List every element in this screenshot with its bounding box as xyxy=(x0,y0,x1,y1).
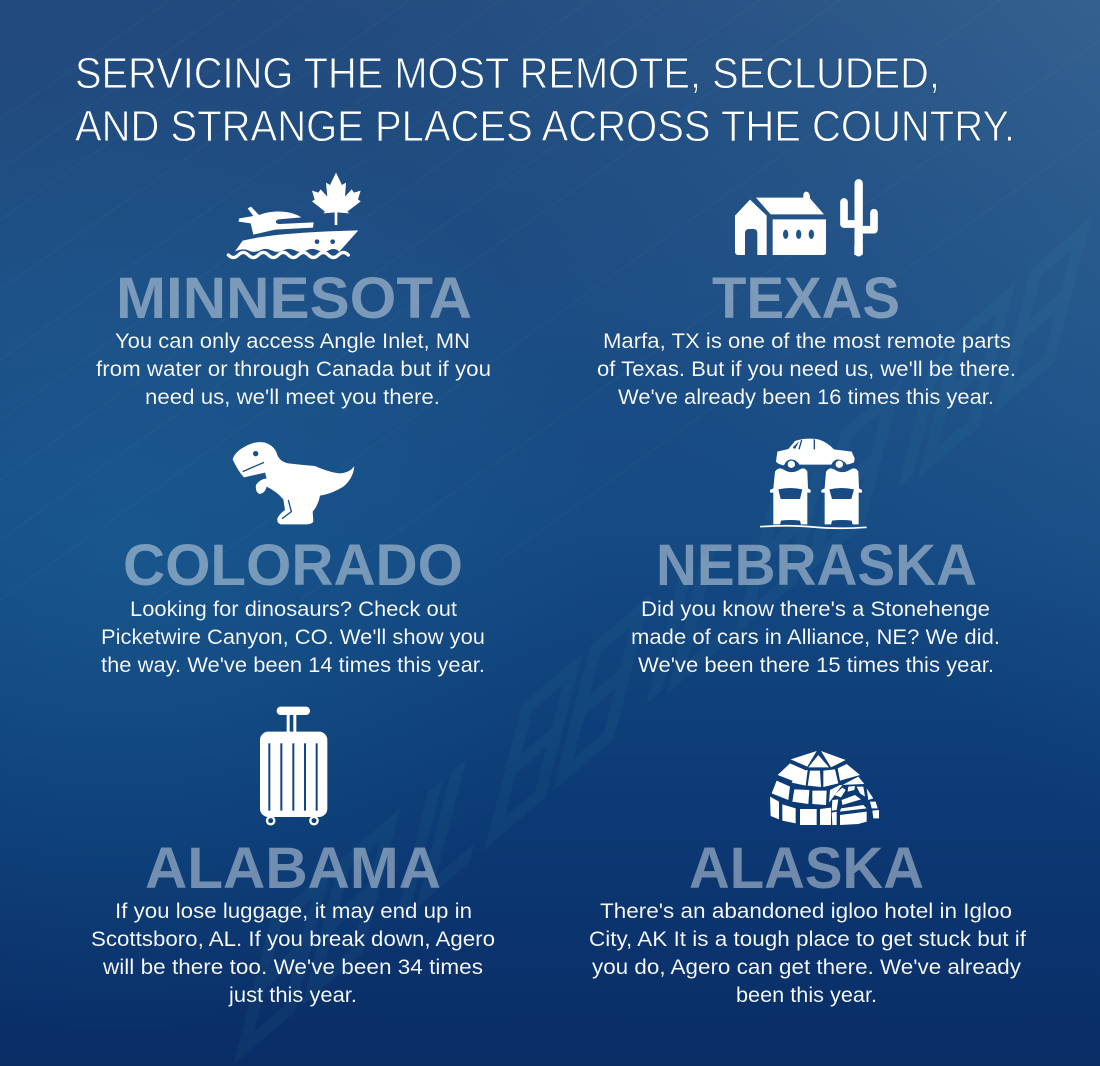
text: Colorado description xyxy=(101,597,485,677)
text: Alabama description: just this year. xyxy=(228,983,357,1007)
title: AND STRANGE PLACES ACROSS THE COUNTRY. xyxy=(75,102,1015,151)
text: Alabama description: If you lose luggage, it may end up in xyxy=(115,899,472,923)
text: Alaska description: been this year. xyxy=(736,983,877,1007)
text: Nebraska description xyxy=(631,597,1000,677)
icon: igloo xyxy=(770,751,879,825)
text: Alaska description: you do, Agero can get there. We've already xyxy=(592,955,1021,979)
text: Colorado description: Picketwire Canyon, CO. We'll show you xyxy=(101,625,485,649)
icon: dinosaur xyxy=(233,442,354,524)
panel: Alabama xyxy=(91,707,495,1007)
title xyxy=(75,49,1015,151)
text: Colorado description: Looking for dinosaurs? Check out xyxy=(130,597,457,621)
heading: Minnesota: MINNESOTA xyxy=(116,266,472,331)
panel: Minnesota xyxy=(96,173,491,409)
heading: Colorado: COLORADO xyxy=(123,533,463,598)
text: Colorado description: the way. We've been 14 times this year. xyxy=(101,653,485,677)
text: Minnesota description: need us, we'll meet you there. xyxy=(145,385,440,409)
text: Alaska description xyxy=(589,899,1026,1007)
text: Alabama description: will be there too. We've been 34 times xyxy=(102,955,483,979)
heading: Texas: TEXAS xyxy=(712,266,900,331)
heading: Nebraska: NEBRASKA xyxy=(656,533,977,598)
text: Nebraska description: We've been there 15 times this year. xyxy=(638,653,994,677)
text: Alaska description: There's an abandoned igloo hotel in Igloo xyxy=(600,899,1012,923)
text: Alabama description: Scottsboro, AL. If you break down, Agero xyxy=(91,927,495,951)
text: Minnesota description xyxy=(96,329,491,409)
text: Texas description: Marfa, TX is one of the most remote parts xyxy=(603,329,1011,353)
icon: house and cactus xyxy=(735,183,874,255)
icon: car stonehenge xyxy=(760,439,867,528)
panel: Colorado xyxy=(101,442,485,677)
text: Texas description xyxy=(597,329,1016,409)
text: Texas description: We've already been 16 times this year. xyxy=(618,385,994,409)
icon: yacht and maple leaf xyxy=(228,173,361,257)
text: Nebraska description: made of cars in Alliance, NE? We did. xyxy=(631,625,1000,649)
icon: suitcase xyxy=(260,707,327,824)
heading: Alabama: ALABAMA xyxy=(145,836,441,901)
heading: Alaska: ALASKA xyxy=(689,836,924,901)
panel: Nebraska xyxy=(631,439,1000,677)
title: SERVICING THE MOST REMOTE, SECLUDED, xyxy=(75,49,940,98)
panel: Texas xyxy=(597,183,1016,409)
text: Alaska description: City, AK It is a tough place to get stuck but if xyxy=(589,927,1026,951)
text: Texas description: of Texas. But if you need us, we'll be there. xyxy=(597,357,1016,381)
text: Nebraska description: Did you know there's a Stonehenge xyxy=(641,597,990,621)
text: Minnesota description: from water or through Canada but if you xyxy=(96,357,491,381)
text: Alabama description xyxy=(91,899,495,1007)
panel: Alaska xyxy=(589,751,1026,1007)
text: Minnesota description: You can only access Angle Inlet, MN xyxy=(115,329,470,353)
